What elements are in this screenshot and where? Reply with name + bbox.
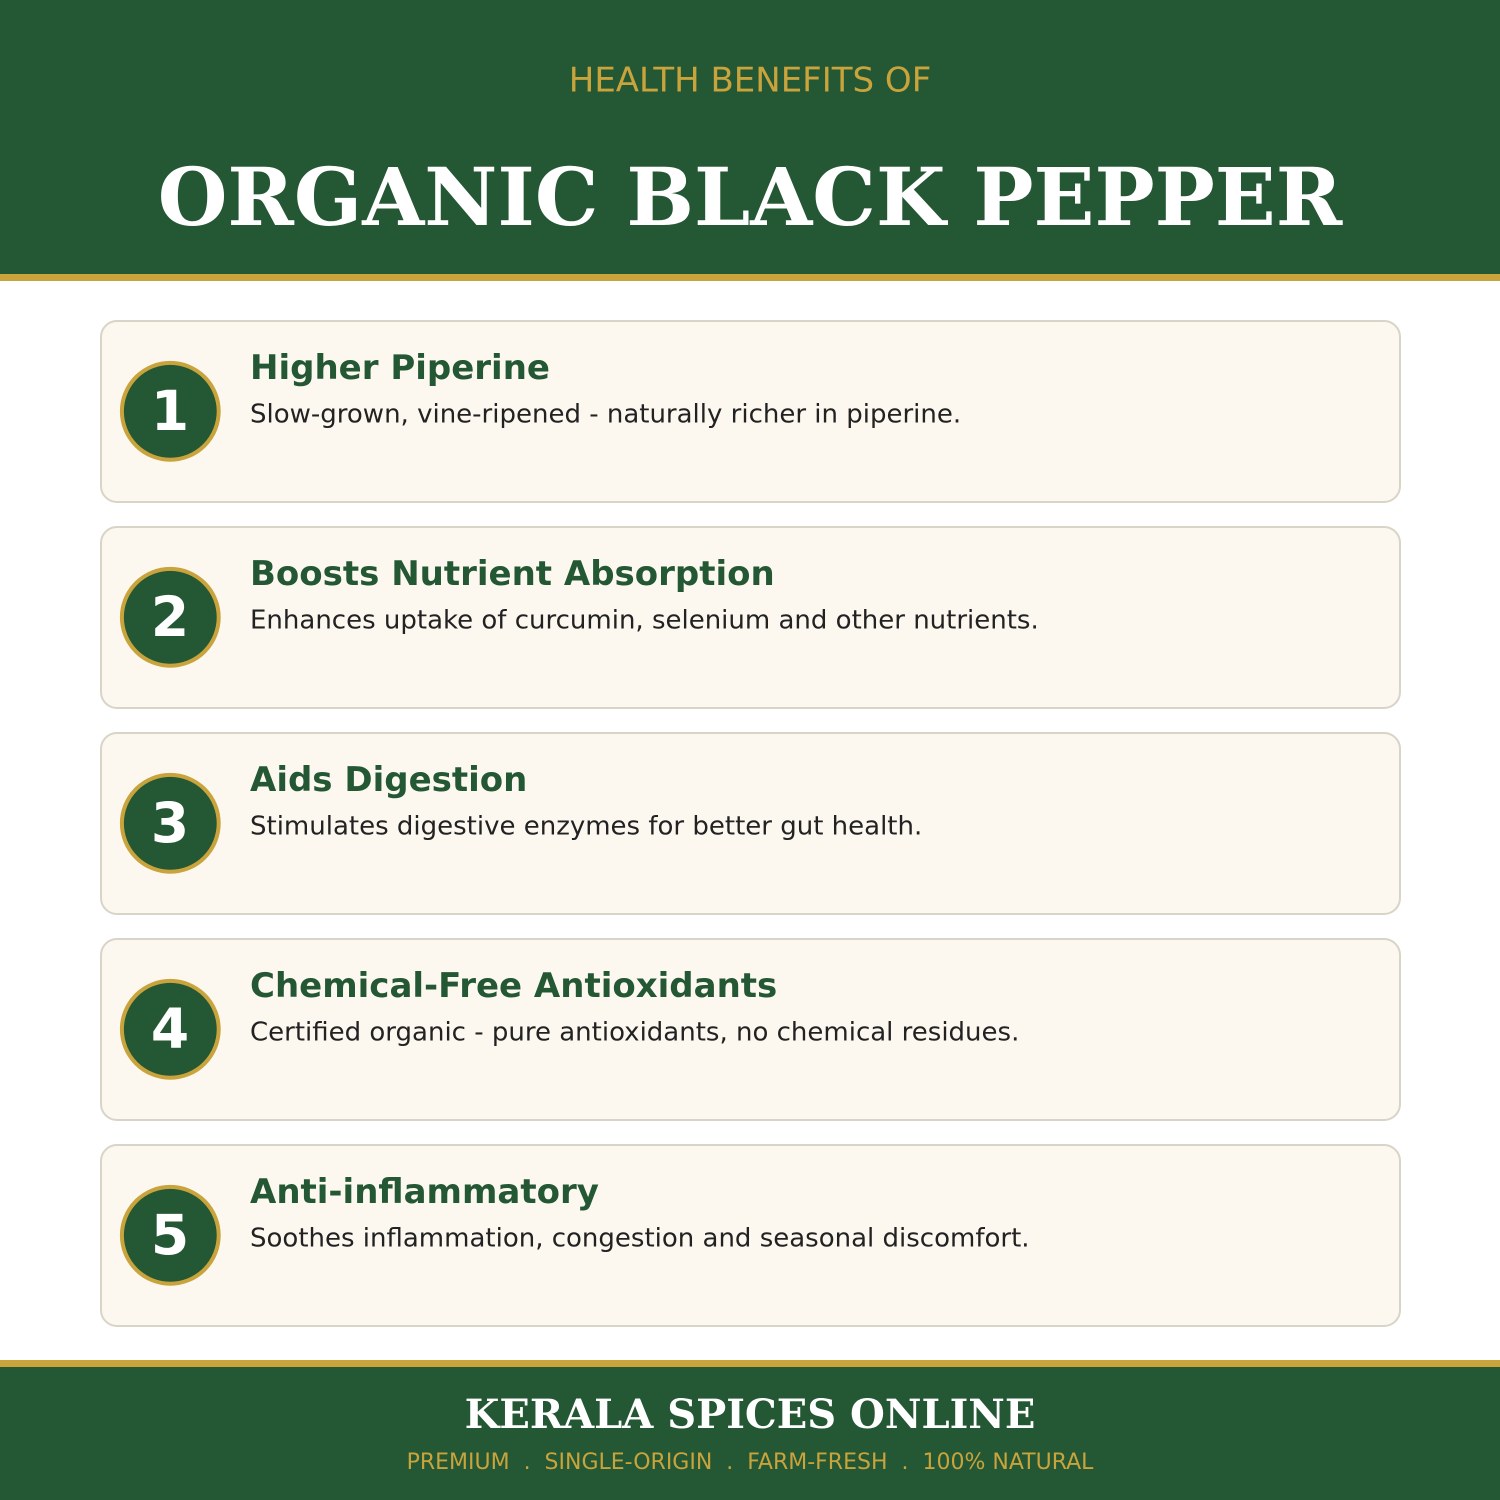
title: ORGANIC BLACK PEPPER bbox=[158, 150, 1343, 244]
heading: Higher Piperine: Higher Piperine bbox=[250, 348, 550, 388]
eyebrow heading: HEALTH BENEFITS OF bbox=[569, 60, 931, 100]
panel: benefit 5 bbox=[101, 1145, 1400, 1326]
icon: number 4 bbox=[122, 981, 219, 1078]
header band bbox=[0, 0, 1500, 281]
footer brand name: KERALA SPICES ONLINE bbox=[465, 1391, 1035, 1438]
panel: benefit 1 bbox=[101, 321, 1400, 502]
heading: Boosts Nutrient Absorption: Boosts Nutrient Absorption bbox=[250, 554, 775, 594]
icon: number 4: 4 bbox=[151, 997, 189, 1061]
description: Aids Digestion: Stimulates digestive enzymes for better gut health. bbox=[250, 812, 922, 842]
panel: benefit 2 bbox=[101, 527, 1400, 708]
heading: Anti-inflammatory: Anti-inflammatory bbox=[250, 1172, 599, 1212]
panel: benefit 3 bbox=[101, 733, 1400, 914]
description: Anti-inflammatory: Soothes inflammation, congestion and seasonal discomfort. bbox=[250, 1224, 1030, 1254]
icon: number 5: 5 bbox=[151, 1203, 189, 1267]
icon: number 2 bbox=[122, 569, 219, 666]
footer band bbox=[0, 1360, 1500, 1500]
icon: number 1 bbox=[122, 363, 219, 460]
icon: number 3: 3 bbox=[151, 791, 189, 855]
icon: number 2: 2 bbox=[151, 585, 189, 649]
footer tagline: PREMIUM . SINGLE-ORIGIN . FARM-FRESH . 100% NATURAL bbox=[407, 1450, 1094, 1475]
icon: number 1: 1 bbox=[151, 379, 189, 443]
description: Boosts Nutrient Absorption: Enhances uptake of curcumin, selenium and other nutrients. bbox=[250, 606, 1039, 636]
heading: Aids Digestion: Aids Digestion bbox=[250, 760, 527, 800]
panel: benefit 4 bbox=[101, 939, 1400, 1120]
icon: number 5 bbox=[122, 1187, 219, 1284]
heading: Chemical-Free Antioxidants: Chemical-Free Antioxidants bbox=[250, 966, 777, 1006]
description: Chemical-Free Antioxidants: Certified organic - pure antioxidants, no chemical residues. bbox=[250, 1018, 1019, 1048]
icon: number 3 bbox=[122, 775, 219, 872]
description: Higher Piperine: Slow-grown, vine-ripened - naturally richer in piperine. bbox=[250, 400, 961, 430]
